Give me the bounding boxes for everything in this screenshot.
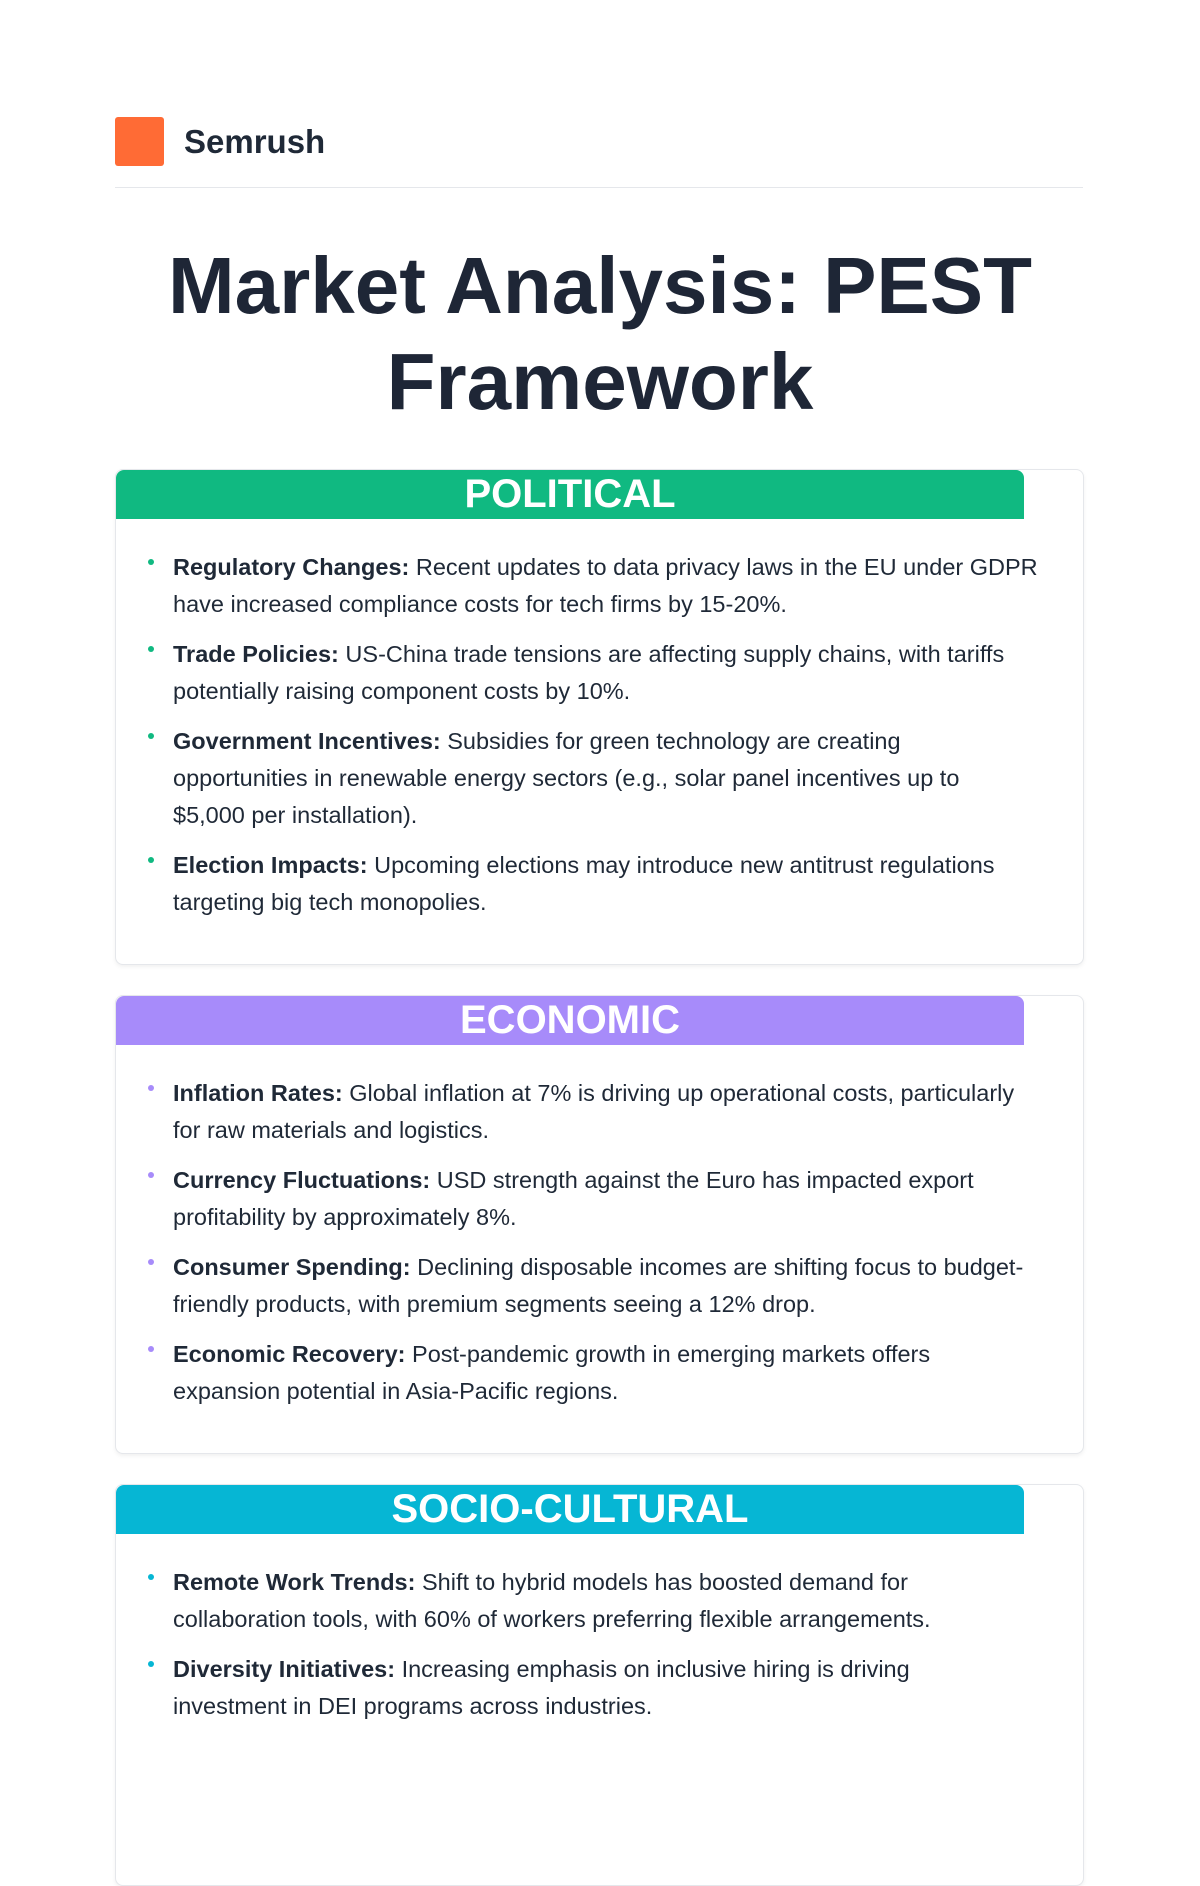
panel: political: Trade Policies: US-China trade tensions are affecting supply chains, with tariffs	[173, 641, 1004, 667]
heading: political	[116, 470, 1024, 519]
panel: socio-cultural	[115, 1484, 1084, 1886]
title: Market Analysis: PEST	[168, 241, 1032, 330]
panel: socio-cultural: Diversity Initiatives: Increasing emphasis on inclusive hiring is driving	[173, 1656, 910, 1682]
panel: economic: for raw materials and logistics.	[173, 1117, 489, 1143]
panel: socio-cultural: collaboration tools, with 60% of workers preferring flexible arrangements.	[173, 1606, 931, 1632]
panel: economic: Consumer Spending: Declining disposable incomes are shifting focus to budget-	[173, 1254, 1023, 1280]
panel: economic	[115, 995, 1084, 1454]
panel: political: Regulatory Changes: Recent updates to data privacy laws in the EU under GDPR	[173, 554, 1038, 580]
title: Framework	[387, 337, 813, 426]
title	[168, 241, 1032, 426]
heading: socio-cultural: SOCIO-CULTURAL	[392, 1487, 748, 1531]
panel: economic: Inflation Rates: Global inflation at 7% is driving up operational costs, particularly	[173, 1080, 1014, 1106]
panel: political: potentially raising component costs by 10%.	[173, 678, 630, 704]
panel: economic: expansion potential in Asia-Pacific regions.	[173, 1378, 618, 1404]
heading: economic: ECONOMIC	[460, 998, 680, 1042]
panel: political	[115, 469, 1084, 965]
panel: economic: profitability by approximately 8%.	[173, 1204, 517, 1230]
heading: economic	[116, 996, 1024, 1045]
logo: Semrush	[184, 122, 325, 160]
panel: political: opportunities in renewable energy sectors (e.g., solar panel incentives up to	[173, 765, 959, 791]
panel: socio-cultural: investment in DEI programs across industries.	[173, 1693, 652, 1719]
panel: political: Election Impacts: Upcoming elections may introduce new antitrust regulations	[173, 852, 995, 878]
logo	[115, 117, 325, 166]
panel: economic: Economic Recovery: Post-pandemic growth in emerging markets offers	[173, 1341, 930, 1367]
heading: political: POLITICAL	[464, 472, 676, 516]
panel: political: $5,000 per installation).	[173, 802, 417, 828]
panel: political: Government Incentives: Subsidies for green technology are creating	[173, 728, 901, 754]
panel: economic: friendly products, with premium segments seeing a 12% drop.	[173, 1291, 816, 1317]
panel: economic: Currency Fluctuations: USD strength against the Euro has impacted export	[173, 1167, 974, 1193]
panel: political: have increased compliance costs for tech firms by 15-20%.	[173, 591, 787, 617]
panel: socio-cultural: Remote Work Trends: Shift to hybrid models has boosted demand for	[173, 1569, 908, 1595]
heading: socio-cultural	[116, 1485, 1024, 1534]
panel: political: targeting big tech monopolies.	[173, 889, 487, 915]
